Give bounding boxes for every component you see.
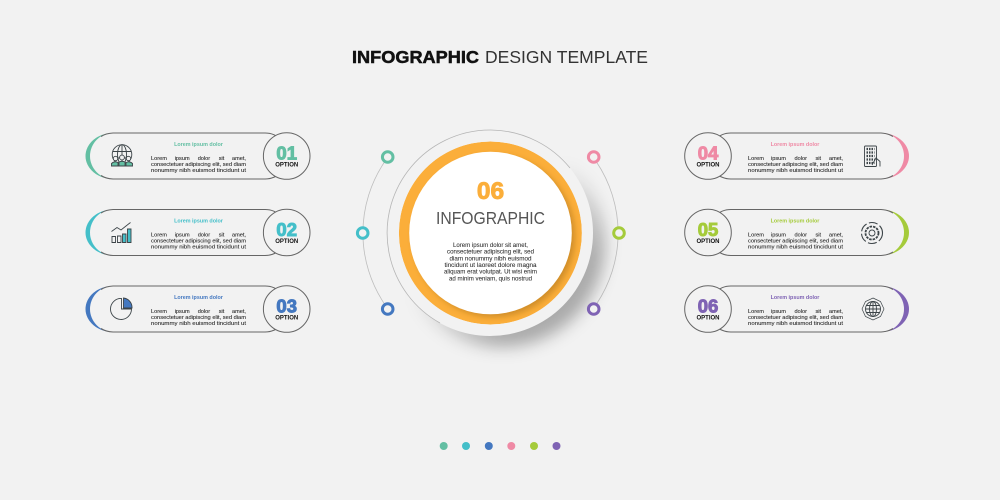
panel: option 05: dolor (794, 232, 807, 238)
panel: option 02: dolor (198, 232, 210, 238)
panel: option 02: ipsum (175, 232, 190, 238)
panel: option 06: amet, (829, 309, 843, 315)
legend dots (440, 442, 560, 450)
panel: option 02: amet, (232, 232, 246, 238)
panel: option 05: consectetuer adipiscing elit, sed diam (748, 238, 843, 244)
panel: option 01: nonummy nibh euismod tincidunt ut (151, 168, 246, 174)
panel: option 03: consectetuer adipiscing elit, sed diam (151, 315, 246, 321)
infographic canvas (86, 50, 909, 450)
panel: option 01: sit (219, 156, 225, 162)
icon: pie chart (110, 298, 132, 319)
center body text (444, 242, 537, 282)
panel: option 06 (685, 286, 909, 332)
panel: option 06: sit (816, 309, 822, 315)
panel: option 01: 01 (276, 142, 297, 164)
panel: option 02: consectetuer adipiscing elit, sed diam (151, 238, 246, 244)
center body text: diam nonummy nibh euismod (450, 255, 532, 262)
panel: option 02: Lorem ipsum dolor (174, 218, 224, 224)
panel: option 03: nonummy nibh euismod tincidunt ut (151, 321, 246, 327)
title: DESIGN TEMPLATE (485, 47, 648, 67)
panel: option 04 (685, 133, 909, 179)
panel: option 04: sit (816, 156, 822, 162)
panel: option 01: amet, (232, 156, 246, 162)
center body text: tincidunt ut laoreet dolore magna (444, 262, 537, 269)
panel: option 03: dolor (198, 309, 210, 315)
panel: option 04: dolor (794, 156, 807, 162)
title: INFOGRAPHIC (352, 47, 479, 67)
panel: option 06: consectetuer adipiscing elit, sed diam (748, 315, 843, 321)
panel: option 05: OPTION (696, 239, 720, 245)
panel: option 06: nonummy nibh euismod tincidunt ut (748, 321, 843, 327)
panel: option 05: amet, (829, 232, 843, 238)
panel: option 04: ipsum (771, 156, 786, 162)
panel: option 03: amet, (232, 309, 246, 315)
icon: bar chart with trend line (112, 222, 131, 242)
icon: network globe (862, 298, 884, 320)
drop shadow (399, 141, 605, 347)
icon: gear with circular arrows (862, 222, 882, 244)
panel: option 06: Lorem (748, 309, 764, 315)
panel: option 03: sit (219, 309, 225, 315)
node rings (357, 152, 624, 314)
panel: option 01: Lorem ipsum dolor (174, 142, 224, 148)
panel: option 05: nonummy nibh euismod tincidunt ut (748, 244, 843, 250)
panel: option 01 (86, 133, 310, 179)
panel: option 04: consectetuer adipiscing elit, sed diam (748, 162, 843, 168)
panel: option 03: Lorem (151, 309, 167, 315)
panel: option 03 (86, 286, 310, 332)
panel: option 04: Lorem (748, 156, 764, 162)
panel: option 05: ipsum (771, 232, 786, 238)
center body text: aliquam erat volutpat. Ut wisi enim (444, 269, 537, 276)
panel: option 05: Lorem (748, 232, 764, 238)
panel: option 02 (86, 209, 310, 256)
connector arcs (363, 162, 618, 304)
panel: option 03: OPTION (275, 316, 298, 322)
panel: option 02: nonummy nibh euismod tincidunt ut (151, 244, 246, 250)
center heading: INFOGRAPHIC (436, 208, 545, 228)
panel: option 02: OPTION (275, 239, 298, 245)
panel: option 01: OPTION (275, 163, 298, 169)
panel: option 01: Lorem (151, 156, 167, 162)
panel: option 01: consectetuer adipiscing elit, sed diam (151, 162, 246, 168)
panel: option 05: sit (816, 232, 822, 238)
center body text: Lorem ipsum dolor sit amet, (453, 242, 528, 249)
panel: option 05: Lorem ipsum dolor (771, 218, 820, 224)
white disc (409, 152, 572, 314)
panel: option 06: ipsum (771, 309, 786, 315)
center number: 06 (477, 178, 504, 205)
panel: option 06: Lorem ipsum dolor (771, 295, 820, 301)
panel: option 02: Lorem (151, 232, 167, 238)
panel: option 05: 05 (698, 219, 718, 240)
center body text: consectetuer adipiscing elit, sed (447, 249, 534, 256)
panel: option 03: 03 (276, 296, 297, 316)
panel: option 06: dolor (794, 309, 807, 315)
icon: globe with people (112, 145, 132, 166)
panel: option 04: 04 (698, 142, 719, 164)
panel: option 01: ipsum (175, 156, 190, 162)
panel: option 02: sit (219, 232, 225, 238)
panel: central circle (363, 130, 618, 347)
orange ring (399, 142, 582, 324)
panel: option 04: nonummy nibh euismod tincidunt ut (748, 168, 843, 174)
panel: option 04: OPTION (696, 163, 720, 169)
icon: calculator in hand (864, 146, 880, 166)
panel: option 04: Lorem ipsum dolor (771, 142, 820, 148)
title (352, 47, 648, 67)
panel: option 03: ipsum (175, 309, 190, 315)
panel: option 06: 06 (698, 296, 718, 316)
panel: option 04: amet, (829, 156, 843, 162)
outer ring (387, 130, 593, 336)
panel: option 03: Lorem ipsum dolor (174, 295, 224, 301)
center body text: ad minim veniam, quis nostrud (449, 275, 532, 282)
panel: option 05 (685, 209, 909, 256)
panel: option 02: 02 (276, 219, 297, 240)
panel: option 01: dolor (198, 156, 210, 162)
panel: option 06: OPTION (696, 316, 720, 322)
